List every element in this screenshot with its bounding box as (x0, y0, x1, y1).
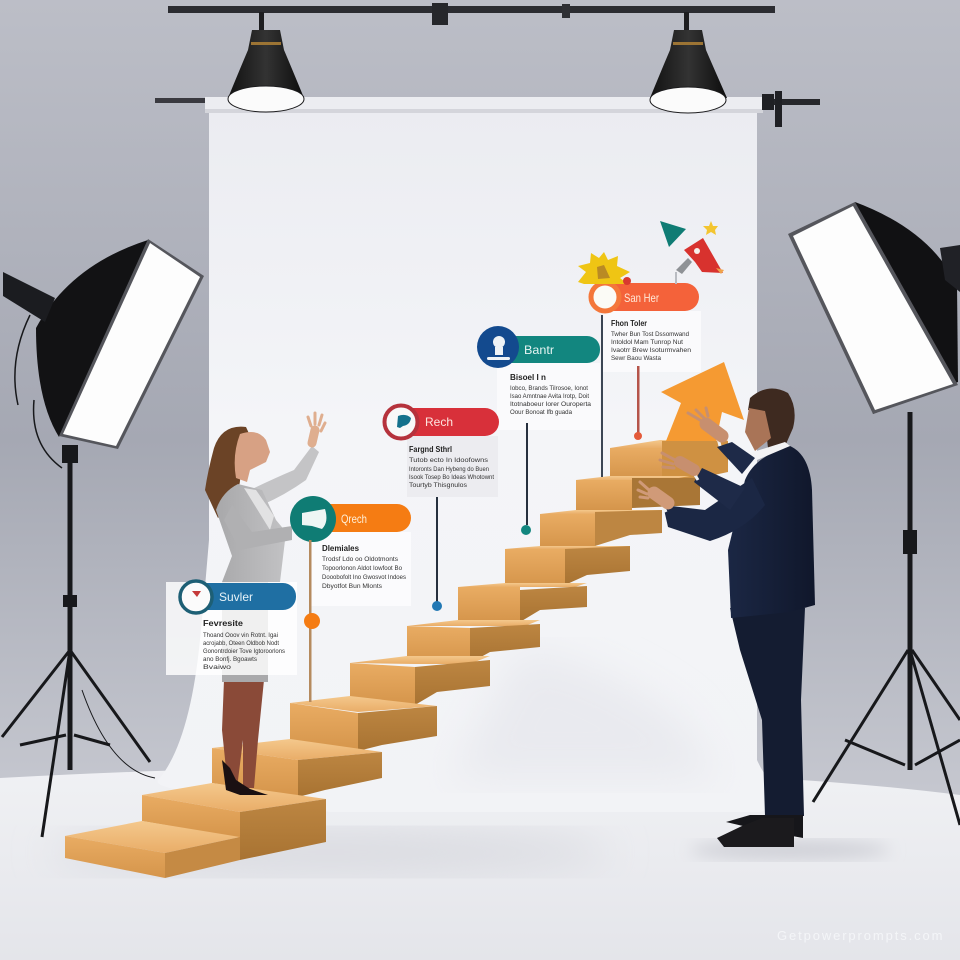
woman hand (308, 413, 325, 443)
body (203, 632, 286, 671)
step 5 (350, 656, 490, 705)
body: Intoronts Dan Hybeng do Buen (409, 466, 489, 473)
step 4 card: Bantr (477, 326, 600, 535)
pill (385, 408, 499, 436)
step 11 (610, 440, 728, 478)
step 5 card: San Her (590, 283, 701, 477)
body: Intoldol Mam Tunrop Nut (611, 339, 683, 346)
step 2 card: Qrech (290, 496, 411, 702)
icon heart (192, 591, 201, 597)
step 2 (142, 783, 326, 860)
body: Oour Bonoat Ifb guada (510, 409, 572, 416)
step 6 (407, 620, 540, 663)
connector (309, 540, 312, 702)
step 1 (65, 821, 240, 878)
backdrop roller and rod (155, 91, 820, 127)
floor shadow under stairs (50, 830, 610, 874)
man hand top (688, 408, 722, 436)
studio floor (0, 767, 960, 960)
connector (637, 366, 640, 434)
pill (315, 504, 411, 532)
left light stand (2, 445, 155, 837)
man hand middle (660, 453, 694, 470)
body: Trodsf Ldo oo Oldotmonts (322, 556, 399, 563)
woman heels (222, 760, 268, 795)
man jacket (728, 446, 815, 618)
woman hair (205, 427, 252, 518)
step 3 card: Rech (384, 406, 499, 611)
icon person (487, 336, 510, 360)
title: San Her (624, 291, 659, 305)
white paper backdrop (158, 108, 800, 812)
woman lower arm (224, 505, 292, 550)
pill (181, 583, 296, 610)
left softbox (3, 239, 204, 468)
woman legs (222, 680, 264, 788)
man hair (748, 389, 795, 448)
right softbox (788, 202, 960, 414)
step 8 (505, 546, 630, 586)
body (409, 457, 494, 489)
body (322, 556, 407, 590)
woman presenter (205, 413, 325, 795)
body: Thoand Ooov vin Rotnt. Igai (203, 632, 278, 639)
body: Tutob ecto In Idoofowns (409, 457, 489, 464)
heading: Bisoel I n (510, 373, 546, 382)
man hand lower (638, 482, 668, 503)
connector (436, 497, 438, 604)
woman skirt (222, 582, 268, 682)
big orange arrow (661, 362, 744, 441)
woman raised arm (250, 446, 319, 505)
card body (407, 436, 498, 497)
man collar (750, 442, 790, 460)
body: Sewr Baou Wasta (611, 355, 661, 362)
body: Iobco, Brands Tilrosoe, Ionot (510, 385, 588, 392)
title: Suvler (219, 590, 253, 604)
watermark: Getpowerprompts.com (777, 928, 943, 943)
right overhead lamp (650, 30, 727, 113)
wooden staircase (65, 440, 728, 878)
icon: yellow star (703, 221, 718, 235)
body: Bvaiwo (203, 664, 231, 671)
dot (432, 601, 442, 611)
icon: sun with hand (578, 252, 631, 285)
step 4 (290, 696, 437, 751)
title: Rech (425, 415, 453, 429)
body: Isao Amntnae Avita Irotp, Doit (510, 393, 589, 400)
title: Qrech (341, 512, 367, 526)
body: Gonontrdoier Tove Igtoroorlons (203, 648, 286, 655)
body: ano Bonfj. Bgoawts (203, 656, 258, 663)
body: Topoorlonon Aldot Iowfoot Bo (322, 565, 402, 572)
icon circle (290, 496, 336, 542)
woman lapel (244, 488, 274, 530)
pill (590, 283, 699, 311)
card body (603, 311, 701, 372)
heading: Fargnd Sthrl (409, 445, 452, 454)
card body (311, 532, 411, 606)
heading: Dlemiales (322, 544, 360, 553)
body (510, 385, 591, 416)
man cuffs (662, 438, 720, 512)
body: Dbyotfot Bun Mlonts (322, 583, 383, 590)
pill (498, 336, 600, 363)
dot (304, 613, 320, 629)
left overhead lamp (228, 30, 304, 112)
step 3 (212, 739, 382, 797)
connector line 4 tall (601, 315, 603, 477)
icon circle (384, 406, 418, 438)
step 1 card: Suvler (166, 581, 297, 675)
woman blazer (216, 484, 286, 582)
icon circle (477, 326, 519, 368)
step 7 (458, 583, 587, 622)
heading: Fevresite (203, 619, 244, 628)
icon circle (591, 283, 619, 311)
right light stand (813, 412, 960, 825)
icon: red rocket (675, 238, 724, 284)
body: Dooobofolt Ino Gwosvot Indoes (322, 574, 407, 581)
man presenter (638, 389, 815, 847)
card body (166, 582, 297, 675)
man upper arm (694, 468, 745, 510)
dot (521, 525, 531, 535)
man face (745, 408, 771, 451)
man raised arm (717, 442, 755, 474)
icon leaf (302, 509, 326, 529)
man front shoe (717, 818, 794, 847)
man rear shoe (726, 815, 803, 838)
body: Ivaotrr Brew Isoturmvahen (611, 347, 691, 354)
body: Isook Tosep Bo Ideas Whotownt (409, 474, 494, 481)
title: Bantr (524, 343, 554, 357)
card body (497, 363, 600, 430)
floor shadow under man (690, 840, 890, 860)
backdrop shading (450, 650, 720, 780)
man legs (730, 608, 805, 816)
step 9 (540, 510, 662, 547)
icon circle (180, 581, 212, 613)
connector (526, 423, 528, 525)
man front arm (663, 478, 765, 541)
body: acrojabb, Oteen Oldbob Nodt (203, 640, 279, 647)
body: Itotnaboeur Iorer Ouroperta (510, 401, 591, 408)
step 10 (576, 476, 700, 510)
icon bubble (397, 415, 411, 428)
icon: teal pennant (660, 221, 686, 247)
body: Tourtyb Thisgnulos (409, 482, 468, 489)
lighting rail (168, 3, 775, 30)
woman head (235, 432, 270, 482)
dot (634, 432, 642, 440)
heading: Fhon Toler (611, 319, 647, 328)
body (611, 331, 691, 362)
body: Twher Bun Tost Dssomwand (611, 331, 689, 338)
